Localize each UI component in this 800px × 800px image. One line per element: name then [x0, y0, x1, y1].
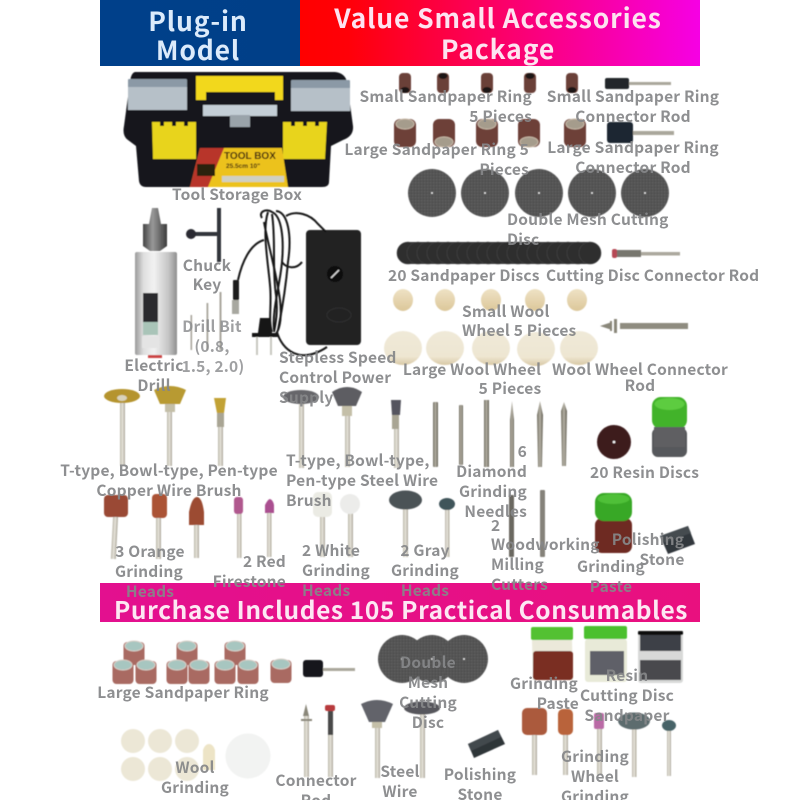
- icon: red firestone heads: [234, 497, 274, 558]
- label: grinding paste: [577, 555, 645, 597]
- label: 3 orange grinding heads: Grinding: [115, 560, 183, 582]
- label: polishing stone: Stone: [639, 548, 685, 570]
- label: 2 white grinding heads: [302, 539, 370, 601]
- label: resin cutting disc sandpaper: [580, 664, 674, 726]
- label: tool storage box: Tool Storage Box: [172, 183, 302, 205]
- label: 2 red firestone: 2 Red: [243, 550, 286, 572]
- label: drill bit sizes: Drill Bit: [182, 315, 242, 337]
- icon: wool wheel connector rod: [600, 319, 688, 333]
- icon: large sandpaper rings: [394, 119, 586, 147]
- label: diamond grinding needles: Diamond: [456, 460, 527, 482]
- icon: gray grinding heads: [389, 490, 455, 557]
- label: steel wire brush: [286, 449, 438, 511]
- label: woodworking milling cutters: 2: [491, 514, 500, 536]
- icon: white grinding heads: [313, 492, 360, 557]
- label: double mesh cutting disc: [507, 208, 669, 250]
- icon: small sandpaper ring connector rod: [605, 78, 671, 89]
- icon: white polishing disc: [226, 734, 270, 778]
- label: 20 resin discs: 20 Resin Discs: [590, 461, 699, 483]
- label: 2 gray grinding heads: Grinding: [391, 559, 459, 581]
- icon: polishing stone: [660, 526, 695, 554]
- label: wool wheel connector rod: Rod: [625, 374, 655, 396]
- label: 2 gray grinding heads: 2 Gray: [400, 539, 450, 561]
- icon: resin disc bottle: [652, 397, 687, 457]
- label: woodworking milling cutters: [491, 514, 600, 595]
- label: woodworking milling cutters: Milling: [491, 553, 544, 575]
- label: woodworking milling cutters: Cutters: [491, 573, 548, 595]
- icon: connector rods: [301, 704, 335, 777]
- icon: woodworking milling cutters: [509, 490, 545, 557]
- icon: orange grinding heads: [104, 494, 204, 559]
- label: wool grinding: Wool: [175, 756, 215, 778]
- label: polishing stone bottom: Polishing: [444, 763, 516, 785]
- label: stepless speed control power supply: Stepless Speed: [279, 346, 397, 368]
- icon: tool storage box: [124, 72, 353, 187]
- label: wool wheel connector rod: Wool Wheel Connector: [552, 358, 728, 380]
- icon: stepless speed control power supply: [232, 210, 361, 355]
- label: double mesh cutting disc bottom: Double: [400, 651, 456, 673]
- label: chuck key: Chuck: [183, 254, 232, 276]
- label: double mesh cutting disc: Double Mesh Cutting: [507, 208, 669, 230]
- icon: polishing stone bottom: [468, 730, 505, 758]
- label: polishing stone: [612, 528, 685, 570]
- label: large wool wheel 5 pieces: Large Wool Wheel: [403, 358, 541, 380]
- label: small sandpaper ring 5 pieces: Small Sandpaper Ring: [360, 85, 532, 107]
- icon: small sandpaper rings: [399, 73, 578, 93]
- label: chuck key: [183, 254, 232, 295]
- label: steel wire brush: Pen-type Steel Wire: [286, 469, 438, 491]
- icon: tool storage box: 25.5cm 10": [226, 163, 260, 170]
- label: stepless speed control power supply: Supply: [279, 386, 334, 408]
- label: large wool wheel 5 pieces: 5 Pieces: [479, 377, 541, 399]
- label: 20 sandpaper discs: 20 Sandpaper Discs: [388, 264, 540, 286]
- label: drill bit sizes: 1.5, 2.0): [182, 355, 244, 377]
- label: wool wheel connector rod: [552, 358, 728, 396]
- label: grinding paste: Grinding: [577, 555, 645, 577]
- icon: double mesh cutting discs: [408, 169, 669, 217]
- banner: purchase includes 105 practical consumables: Purchase Includes 105 Practical Consumables: [114, 592, 688, 627]
- label: cutting disc connector rod: Cutting Disc Connector Rod: [546, 264, 759, 286]
- icon: tool storage box: TOOL BOX: [224, 151, 276, 162]
- label: grinding wheel grinding: Grinding: [561, 745, 629, 767]
- header: Plug-in Model: Model: [156, 29, 240, 68]
- label: steel wire: [380, 760, 420, 800]
- label: grinding wheel grinding: Wheel: [571, 765, 619, 787]
- label: small sandpaper ring 5 pieces: 5 Pieces: [469, 105, 532, 127]
- header: Plug-in Model: [100, 0, 300, 68]
- label: 2 white grinding heads: Grinding: [302, 559, 370, 581]
- icon: bundled large sandpaper rings: [112, 641, 292, 684]
- label: 2 gray grinding heads: [391, 539, 459, 601]
- label: 3 orange grinding heads: [115, 540, 185, 602]
- label: steel wire brush: Brush: [286, 489, 332, 511]
- label: small wool wheel 5 pieces: Wheel 5 Pieces: [462, 319, 577, 341]
- label: drill bit sizes: [182, 315, 244, 377]
- label: connector rod: Connector: [275, 769, 357, 791]
- label: diamond grinding needles: Grinding: [459, 480, 527, 502]
- label: wool grinding: [161, 756, 229, 798]
- label: small wool wheel 5 pieces: [462, 300, 577, 341]
- label: copper wire brush: [60, 459, 278, 501]
- icon: sandpaper jar: [638, 631, 683, 683]
- label: copper wire brush: T-type, Bowl-type, Pen-type: [60, 459, 278, 481]
- label: resin cutting disc sandpaper: Resin: [606, 664, 648, 686]
- label: large sandpaper ring connector rod: Connector Rod: [575, 156, 691, 178]
- label: small sandpaper ring connector rod: [547, 85, 719, 127]
- label: small sandpaper ring 5 pieces: [360, 85, 532, 127]
- icon: steel wire brushes: [283, 387, 401, 468]
- label: grinding paste: Paste: [590, 575, 632, 597]
- label: grinding wheel grinding: [561, 745, 629, 800]
- label: 2 gray grinding heads: Heads: [401, 579, 449, 601]
- icon: resin disc jar: [584, 626, 627, 682]
- label: polishing stone: Polishing: [612, 528, 684, 550]
- label: double mesh cutting disc bottom: [399, 651, 457, 733]
- label: small sandpaper ring connector rod: Connector Rod: [575, 105, 691, 127]
- label: drill bit sizes: (0.8,: [194, 335, 230, 357]
- icon: grinding paste jar: [531, 627, 573, 680]
- label: woodworking milling cutters: Woodworking: [491, 533, 600, 555]
- label: double mesh cutting disc: Disc: [507, 228, 539, 250]
- icon: large sandpaper ring connector rod: [607, 122, 674, 143]
- label: large sandpaper ring: Large Sandpaper Ring: [97, 681, 269, 703]
- label: 2 red firestone: Firestone: [213, 570, 286, 592]
- label: diamond grinding needles: 6: [518, 440, 527, 462]
- header: Plug-in Model: Plug-in: [148, 0, 248, 39]
- label: electric drill: Drill: [137, 374, 171, 396]
- label: copper wire brush: Copper Wire Brush: [96, 479, 242, 501]
- label: double mesh cutting disc bottom: Mesh: [408, 671, 448, 693]
- label: 3 orange grinding heads: 3 Orange: [115, 540, 185, 562]
- label: resin cutting disc sandpaper: Sandpaper: [584, 704, 670, 726]
- label: diamond grinding needles: Needles: [464, 500, 527, 522]
- label: chuck key: Key: [193, 273, 221, 295]
- icon: diamond grinding needles: [433, 400, 567, 467]
- icon: grinding paste jar: [595, 493, 632, 553]
- label: grinding paste bottom: [510, 672, 579, 714]
- label: large wool wheel 5 pieces: [403, 358, 541, 399]
- label: double mesh cutting disc bottom: Cutting: [399, 691, 457, 713]
- label: steel wire brush: T-type, Bowl-type,: [286, 449, 430, 471]
- label: stepless speed control power supply: [279, 346, 397, 408]
- header: Value Small Accessories Package: Package: [441, 28, 555, 67]
- label: resin cutting disc sandpaper: Cutting Disc: [580, 684, 674, 706]
- icon: small wool wheels: [393, 289, 587, 311]
- header: Value Small Accessories Package: [300, 0, 700, 67]
- label: double mesh cutting disc bottom: Disc: [412, 711, 444, 733]
- label: polishing stone bottom: [444, 763, 516, 800]
- icon: cutting disc connector rod: [612, 249, 680, 258]
- icon: felt wool grinding pieces: [121, 729, 215, 781]
- label: 2 white grinding heads: Heads: [302, 579, 350, 601]
- label: wool grinding: Grinding: [161, 776, 229, 798]
- label: large sandpaper ring 5 pieces: [344, 138, 529, 180]
- icon: sandpaper ring connector: [303, 660, 355, 677]
- icon: 20 sandpaper discs: [397, 242, 601, 264]
- icon: mesh cutting discs stack: [378, 635, 488, 683]
- label: large sandpaper ring 5 pieces: Large Sandpaper Ring 5: [344, 138, 529, 160]
- label: small wool wheel 5 pieces: Small Wool: [462, 300, 550, 322]
- label: large sandpaper ring connector rod: Large Sandpaper Ring: [547, 136, 719, 158]
- label: grinding paste bottom: Paste: [537, 692, 579, 714]
- label: stepless speed control power supply: Control Power: [279, 366, 391, 388]
- icon: resin disc: [597, 425, 631, 459]
- icon: drill bits: [190, 292, 222, 350]
- label: 3 orange grinding heads: Heads: [126, 580, 174, 602]
- icon: steel wire brushes bottom row: [361, 700, 440, 778]
- label: large sandpaper ring connector rod: [547, 136, 719, 178]
- label: diamond grinding needles: [456, 440, 527, 522]
- icon: copper wire brushes: [104, 386, 226, 466]
- icon: electric drill: [135, 208, 177, 358]
- label: 2 red firestone: [213, 550, 286, 592]
- label: small sandpaper ring connector rod: Small Sandpaper Ring: [547, 85, 719, 107]
- label: electric drill: Electric: [124, 354, 184, 376]
- label: 2 white grinding heads: 2 White: [302, 539, 360, 561]
- icon: grinding wheels bottom row: [522, 708, 676, 777]
- label: steel wire: Steel: [380, 760, 420, 782]
- label: electric drill: [124, 354, 184, 396]
- label: large sandpaper ring 5 pieces: Pieces: [479, 158, 529, 180]
- icon: large wool wheels: [384, 331, 598, 366]
- icon: chuck key: [186, 208, 221, 262]
- label: grinding paste bottom: Grinding: [510, 672, 578, 694]
